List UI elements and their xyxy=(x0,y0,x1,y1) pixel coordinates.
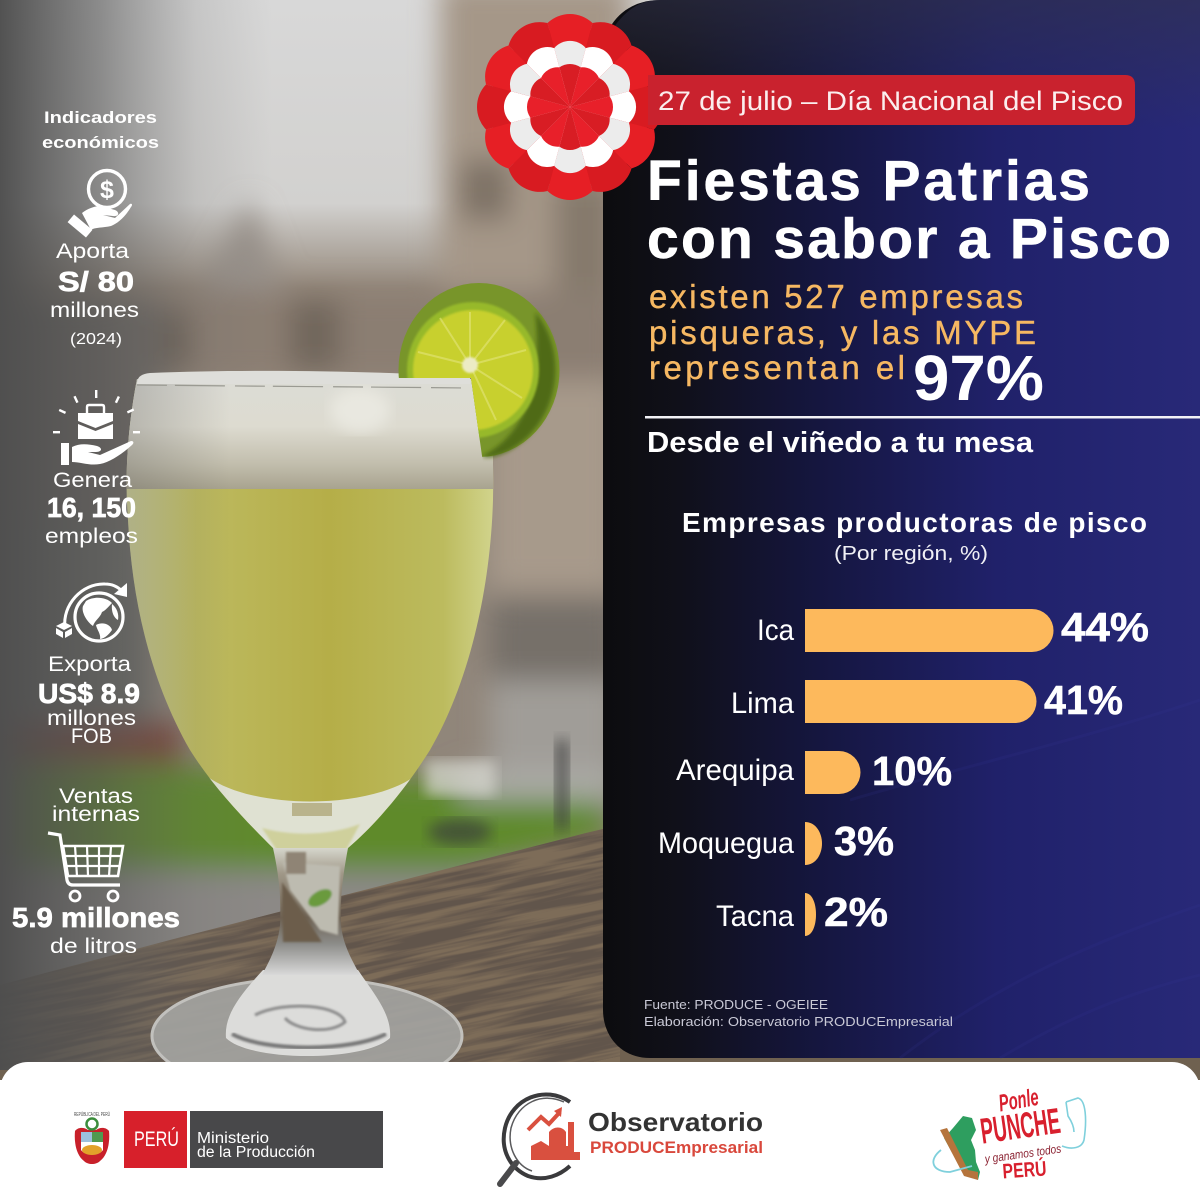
indicator: exports: US$ 8.9 xyxy=(38,678,140,709)
bar chart: companies by region xyxy=(658,604,1149,936)
bar: Ica xyxy=(757,604,1149,652)
source note xyxy=(644,997,953,1029)
rosette (escarapela) xyxy=(477,14,663,200)
bar: Tacna: 2% xyxy=(824,889,888,935)
title: Fiestas Patrias xyxy=(647,149,1090,213)
bar: Tacna: Tacna xyxy=(716,900,794,933)
icon: magnifier with factory and rising arrow xyxy=(500,1094,580,1184)
indicator: contribution xyxy=(50,240,139,348)
indicator: jobs xyxy=(45,469,138,548)
bar: Arequipa xyxy=(676,748,952,794)
indicator: internal sales label: internas xyxy=(52,803,140,826)
icon: shopping cart xyxy=(48,833,123,901)
title: con sabor a Pisco xyxy=(647,207,1171,271)
bar: Ica: 44% xyxy=(1061,604,1149,650)
logo: Observatorio PRODUCEmpresarial: PRODUCEmpresarial xyxy=(590,1139,763,1157)
logo: Ponle Punche xyxy=(933,1084,1086,1184)
indicator: contribution: (2024) xyxy=(70,331,122,348)
indicator: exports xyxy=(38,653,140,748)
title xyxy=(647,149,1171,271)
indicator: exports: Exporta xyxy=(48,653,131,676)
indicator: contribution: millones xyxy=(50,299,139,322)
wooden table xyxy=(0,677,1200,1187)
indicator: jobs: Genera xyxy=(53,469,132,492)
indicator: internal sales label xyxy=(52,785,140,826)
left gray gradient overlay xyxy=(0,0,272,1070)
subtitle: 527 companies, 97% xyxy=(649,278,1044,414)
glass bowl: liquid and foam xyxy=(120,370,500,860)
bar: Moquegua: Moquegua xyxy=(658,827,794,860)
glass foot xyxy=(152,970,462,1094)
bar: Moquegua: 3% xyxy=(834,818,894,864)
icon: Peru map hugged by arm xyxy=(933,1116,980,1180)
panel: economic indicators column xyxy=(12,108,180,958)
source note: Elaboración: Observatorio PRODUCEmpresarial xyxy=(644,1014,953,1029)
logo: Ministerio de la Producción: de la Producción xyxy=(197,1144,315,1161)
indicator: internal sales value: de litros xyxy=(50,935,137,958)
bar: Moquegua xyxy=(658,818,894,865)
icon: hand with coin xyxy=(68,170,132,238)
bar: Lima: 41% xyxy=(1044,677,1123,723)
section heading: Desde el viñedo a tu mesa xyxy=(647,427,1034,459)
source note: Fuente: PRODUCE - OGEIEE xyxy=(644,997,828,1012)
indicator: internal sales label: Ventas xyxy=(59,785,133,808)
icon: globe with export arrow xyxy=(56,583,127,641)
logo: Ministerio de la Producción xyxy=(74,1111,383,1168)
bar: Lima: Lima xyxy=(731,687,794,720)
chart title: Empresas productoras de pisco xyxy=(682,507,1147,538)
logo: Ponle Punche: PERÚ xyxy=(1002,1157,1047,1184)
chart title xyxy=(682,507,1147,565)
icon: Peruvian coat of arms xyxy=(74,1111,110,1164)
icon: flexed arm xyxy=(1062,1098,1086,1148)
bar: Lima xyxy=(731,677,1123,723)
subtitle: 527 companies, 97%: existen 527 empresas xyxy=(649,278,1023,315)
glass stem xyxy=(262,848,360,975)
indicator: contribution: Aporta xyxy=(56,240,129,263)
indicator: exports: FOB xyxy=(71,725,112,748)
logo: Ministerio de la Producción: PERÚ xyxy=(134,1128,179,1151)
subtitle: 527 companies, 97%: representan el xyxy=(649,349,905,386)
bar: Arequipa: 10% xyxy=(872,748,952,794)
icon: Peruvian coat of arms: REPÚBLICA DEL PERÚ xyxy=(74,1111,110,1118)
logo: Ponle Punche: Ponle xyxy=(997,1084,1041,1117)
logo: Ponle Punche: y ganamos todos xyxy=(983,1142,1062,1166)
logo: Observatorio PRODUCEmpresarial: Observatorio xyxy=(588,1107,763,1137)
lime slice xyxy=(398,283,560,457)
subtitle: 527 companies, 97%: 97% xyxy=(913,342,1044,414)
subtitle: 527 companies, 97%: pisqueras, y las MYPE xyxy=(649,314,1036,351)
icon: hand with coin: $ xyxy=(100,176,114,204)
bar: Tacna xyxy=(716,889,888,936)
indicators heading: Indicadores xyxy=(44,108,157,127)
indicator: internal sales value: 5.9 millones xyxy=(12,902,180,933)
icon: hand with briefcase xyxy=(53,390,140,465)
pisco sour glass xyxy=(120,370,500,1094)
bar: Ica: Ica xyxy=(757,614,794,647)
indicators heading: económicos xyxy=(42,133,159,152)
indicator: contribution: S/ 80 xyxy=(58,266,134,297)
bar: Arequipa: Arequipa xyxy=(676,754,794,787)
chart title: (Por región, %) xyxy=(834,543,988,565)
footer band xyxy=(0,1062,1200,1200)
date banner: 27 de julio – Día Nacional del Pisco xyxy=(658,86,1123,116)
date banner xyxy=(648,75,1135,125)
indicator: exports: millones xyxy=(47,707,136,730)
indicator: jobs: 16, 150 xyxy=(47,492,136,523)
panel: dark blue content panel xyxy=(603,0,1200,1058)
indicator: internal sales value xyxy=(12,902,180,958)
logo: Ministerio de la Producción: Ministerio xyxy=(197,1130,269,1147)
logo: Ponle Punche: PUNCHE xyxy=(978,1100,1063,1151)
logo: Observatorio PRODUCEmpresarial xyxy=(500,1094,763,1184)
indicators heading xyxy=(42,108,159,152)
indicator: jobs: empleos xyxy=(45,525,138,548)
glass rim xyxy=(137,371,470,388)
